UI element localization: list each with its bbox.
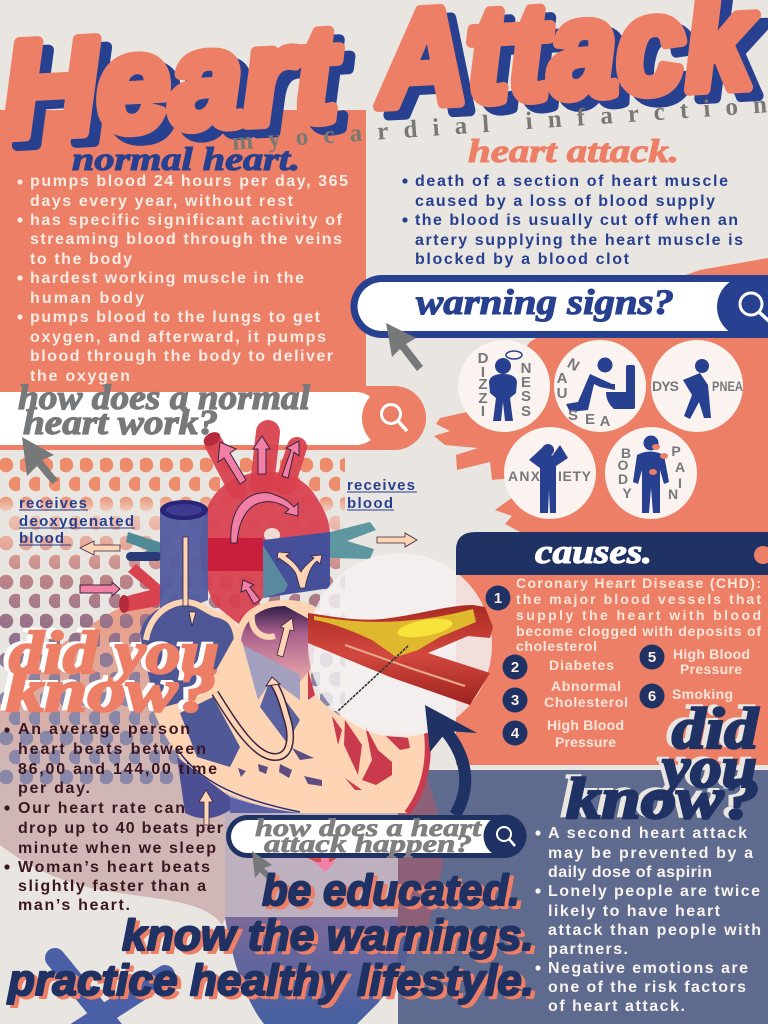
text block: heart attack facts: blocked by a blood clot bbox=[415, 251, 630, 268]
text block: did you know left bbox=[4, 721, 223, 914]
icon: body pain: I bbox=[678, 475, 682, 491]
aortic branches bbox=[214, 432, 297, 490]
lower centre tint bbox=[225, 790, 409, 917]
text block: normal heart facts: the oxygen bbox=[30, 368, 130, 385]
text block: did you know right: Negative emotions are bbox=[548, 960, 748, 977]
curved arrow bbox=[425, 705, 477, 815]
aorta bbox=[200, 472, 330, 625]
text block: did you know right: A second heart attack bbox=[548, 825, 747, 842]
text block: did you know right: one of the risk factors bbox=[548, 979, 746, 996]
search bar: how does a heart attack happen: attack happen? bbox=[264, 831, 472, 858]
text block: did you know right: attack than people with bbox=[548, 922, 761, 939]
text block: normal heart facts: blood through the body to deliver bbox=[30, 348, 333, 365]
panel: causes: 3 bbox=[511, 692, 519, 709]
causes list bbox=[516, 575, 761, 750]
right chamber bbox=[241, 606, 320, 682]
icon: dizziness: E bbox=[521, 374, 531, 391]
slogan bbox=[7, 866, 538, 1008]
blue blob at bottom bbox=[225, 917, 398, 1024]
panel: causes: 5 bbox=[648, 649, 656, 666]
red tint over slate panel bbox=[398, 770, 443, 930]
panel: causes: 6 bbox=[648, 688, 656, 705]
icon: anxiety bbox=[504, 427, 596, 519]
label: receives blood: blood bbox=[347, 495, 393, 512]
vena cava bbox=[160, 510, 208, 620]
text block: did you know left: Woman’s heart beats bbox=[18, 859, 210, 876]
number badges bbox=[486, 586, 664, 746]
title: Heart Attack: Heart bbox=[0, 0, 345, 166]
text block: did you know left: heart beats between bbox=[18, 741, 206, 758]
text block: did you know left: 86,00 and 144,00 time bbox=[18, 761, 217, 778]
icon: body pain bbox=[605, 427, 697, 519]
label: receives deoxygenated blood: blood bbox=[19, 530, 64, 547]
text block: heart attack facts: artery supplying the heart muscle is bbox=[415, 232, 743, 249]
heading: did you know left: did you bbox=[9, 620, 219, 686]
search bar: warning signs bbox=[350, 275, 768, 338]
text block: normal heart facts: streaming blood through the veins bbox=[30, 231, 342, 248]
causes list: Pressure bbox=[555, 734, 616, 750]
icon: dizziness bbox=[458, 340, 550, 432]
inferior vena cava bbox=[177, 757, 230, 818]
text block: did you know right: partners. bbox=[548, 941, 628, 958]
panel: second did you know background bbox=[398, 770, 768, 1024]
search bar: warning signs: warning signs? bbox=[416, 282, 674, 322]
icon: nausea: S bbox=[568, 407, 578, 424]
icon: dizziness: I bbox=[481, 403, 485, 420]
text block: did you know right: likely to have heart bbox=[548, 903, 721, 920]
red vessel left bbox=[120, 564, 166, 612]
text block: did you know right: Lonely people are twice bbox=[548, 883, 760, 900]
icon: nausea bbox=[554, 340, 646, 432]
heading: did you know left: know? bbox=[6, 658, 216, 724]
title: Heart Attack: Heart bbox=[8, 5, 356, 175]
text block: did you know right bbox=[535, 825, 761, 1015]
label: receives blood: receives bbox=[347, 477, 415, 494]
blue cross at bottom left bbox=[55, 958, 165, 1024]
panel: causes: causes. bbox=[535, 534, 652, 571]
icon: nausea: N bbox=[564, 355, 582, 375]
label: receives deoxygenated blood: deoxygenated bbox=[19, 513, 134, 530]
icon: dizziness: N bbox=[521, 360, 531, 377]
U-shaped flow arrow bbox=[215, 684, 290, 757]
heading: did you know right: you bbox=[655, 735, 757, 800]
text block: normal heart facts: has specific significant activity of bbox=[30, 212, 343, 229]
icon: nausea: E bbox=[585, 411, 595, 428]
text block: did you know left: per day. bbox=[18, 780, 90, 797]
pink arrow bbox=[303, 850, 340, 872]
text block: did you know right: of heart attack. bbox=[548, 998, 685, 1015]
flow arrows bbox=[80, 436, 299, 604]
icon: nausea: U bbox=[557, 385, 567, 402]
text block: normal heart facts: hardest working muscle in the bbox=[30, 270, 304, 287]
text block: heart attack facts: the blood is usually cut off when an bbox=[415, 212, 738, 229]
panel: causes: 4 bbox=[511, 725, 520, 742]
heading: did you know right: did bbox=[667, 694, 754, 759]
text block: normal heart facts bbox=[17, 173, 348, 385]
text block: heart attack facts: death of a section of heart muscle bbox=[415, 173, 728, 190]
causes list: become clogged with deposits of bbox=[516, 623, 761, 639]
text block: did you know left: An average person bbox=[18, 721, 190, 738]
search bar: how does a normal heart work: heart work? bbox=[23, 403, 218, 442]
icon: nausea: A bbox=[600, 413, 611, 430]
causes list: Abnormal bbox=[551, 678, 621, 694]
title: Heart Attack bbox=[0, 0, 768, 175]
slogan: know the warnings. bbox=[126, 914, 538, 963]
search bar: how does a normal heart work bbox=[0, 378, 426, 450]
slogan: know the warnings. bbox=[122, 911, 534, 960]
text block: normal heart facts: pumps blood 24 hours per day, 365 bbox=[30, 173, 348, 190]
label: receives blood bbox=[347, 477, 417, 512]
panel: causes: 1 bbox=[494, 590, 502, 607]
search bar: how does a heart attack happen: how does a heart bbox=[255, 815, 482, 842]
text block: did you know right: daily dose of aspirin bbox=[548, 864, 712, 881]
text block: normal heart facts: days every year, without rest bbox=[30, 193, 294, 210]
blue wall bbox=[140, 603, 240, 757]
causes list: cholesterol bbox=[516, 638, 597, 654]
blob behind did you know bbox=[0, 600, 240, 925]
text block: normal heart facts: human body bbox=[30, 290, 144, 307]
text block: normal heart facts: oxygen, and afterward, it pumps bbox=[30, 329, 326, 346]
text block: did you know left: drop up to 40 beats per bbox=[18, 820, 223, 837]
brush stroke behind warning signs bbox=[434, 258, 768, 560]
text block: normal heart facts: pumps blood to the lungs to get bbox=[30, 309, 321, 326]
causes list: High Blood bbox=[547, 717, 624, 733]
heading: did you know left: know? bbox=[1, 656, 211, 722]
label: receives deoxygenated blood: receives bbox=[19, 495, 87, 512]
text block: heart attack facts bbox=[402, 173, 743, 268]
trabeculae bbox=[238, 748, 322, 786]
icon: anxiety: ANX bbox=[508, 468, 541, 484]
causes list: Diabetes bbox=[549, 657, 614, 673]
slogan: practice healthy lifestyle. bbox=[7, 956, 534, 1005]
panel: normal heart background bbox=[0, 110, 366, 400]
icon: body pain: B bbox=[621, 445, 631, 461]
icon: nausea: A bbox=[557, 370, 568, 387]
icon: dizziness: Z bbox=[478, 376, 488, 393]
dot pattern bbox=[0, 456, 345, 786]
heading: did you know right: you bbox=[650, 733, 752, 798]
icon: dizziness: I bbox=[481, 364, 485, 381]
icon: dizziness: S bbox=[521, 388, 531, 405]
pulmonary artery bbox=[263, 532, 330, 598]
left atrium ring bbox=[146, 602, 237, 640]
icon: dyspnea: PNEA bbox=[712, 378, 743, 394]
causes list: Coronary Heart Disease (CHD): bbox=[516, 575, 761, 591]
icon: body pain: D bbox=[618, 471, 628, 487]
heading: did you know left bbox=[1, 618, 219, 724]
icon: dyspnea bbox=[651, 340, 743, 432]
peach body bbox=[153, 601, 428, 813]
search bar: how does a heart attack happen bbox=[226, 814, 526, 858]
panel: causes: 2 bbox=[511, 659, 519, 676]
heading: did you know right: know? bbox=[561, 764, 754, 829]
slogan: practice healthy lifestyle. bbox=[11, 959, 538, 1008]
causes list: Smoking bbox=[672, 686, 733, 702]
lower cavities bbox=[180, 697, 240, 767]
text block: did you know left: Our heart rate can bbox=[18, 800, 185, 817]
subtitle: myocardial infarction: myocardial infarction bbox=[231, 91, 768, 156]
lens circle bbox=[308, 553, 492, 737]
heading: did you know right: know? bbox=[566, 766, 759, 831]
artery bbox=[308, 605, 493, 705]
icon: cursor bbox=[252, 851, 276, 884]
muscle fibres bbox=[308, 670, 410, 790]
causes list: the major blood vessels that bbox=[516, 591, 761, 607]
icon: dyspnea: DYS bbox=[652, 378, 679, 394]
heading: did you know right: did bbox=[672, 696, 759, 761]
heading: heart attack: heart attack. bbox=[468, 134, 679, 170]
heart illustration bbox=[80, 429, 493, 825]
causes list: High Blood bbox=[673, 646, 750, 662]
causes list: Pressure bbox=[680, 661, 742, 677]
heading: normal heart: normal heart. bbox=[72, 142, 300, 178]
icon: cursor bbox=[22, 437, 58, 484]
text block: normal heart facts: to the body bbox=[30, 251, 132, 268]
icon: body pain: N bbox=[668, 486, 678, 502]
text block: heart attack facts: caused by a loss of blood supply bbox=[415, 193, 715, 210]
icon: body pain: Y bbox=[622, 485, 632, 501]
icon: dizziness: Z bbox=[478, 390, 488, 407]
text block: did you know left: minute when we sleep bbox=[18, 840, 216, 857]
icon: cursor bbox=[386, 323, 423, 371]
causes list: supply the heart with blood bbox=[516, 607, 761, 623]
slogan: be educated. bbox=[262, 866, 520, 915]
icon: body pain: O bbox=[618, 457, 629, 473]
icon: dizziness: S bbox=[521, 403, 531, 420]
icon: dizziness: D bbox=[478, 350, 489, 367]
slogan: be educated. bbox=[266, 869, 524, 918]
heading: did you know right bbox=[561, 694, 759, 831]
left teal vessels bbox=[126, 532, 162, 560]
text block: did you know right: may be prevented by a bbox=[548, 845, 753, 862]
text block: did you know left: slightly faster than a bbox=[18, 878, 206, 895]
panel: causes bbox=[456, 532, 768, 750]
icon: body pain: P bbox=[671, 443, 681, 459]
panel: causes background bbox=[456, 570, 768, 765]
search bar: how does a normal heart work: how does a normal bbox=[18, 378, 310, 417]
text block: did you know left: man’s heart. bbox=[18, 897, 130, 914]
icon: anxiety: IETY bbox=[558, 468, 592, 484]
mid chamber bbox=[243, 645, 300, 700]
icon: body pain: A bbox=[675, 459, 685, 475]
label: receives deoxygenated blood bbox=[19, 495, 135, 547]
causes list: Cholesterol bbox=[544, 694, 628, 710]
heading: did you know left: did you bbox=[4, 618, 214, 684]
